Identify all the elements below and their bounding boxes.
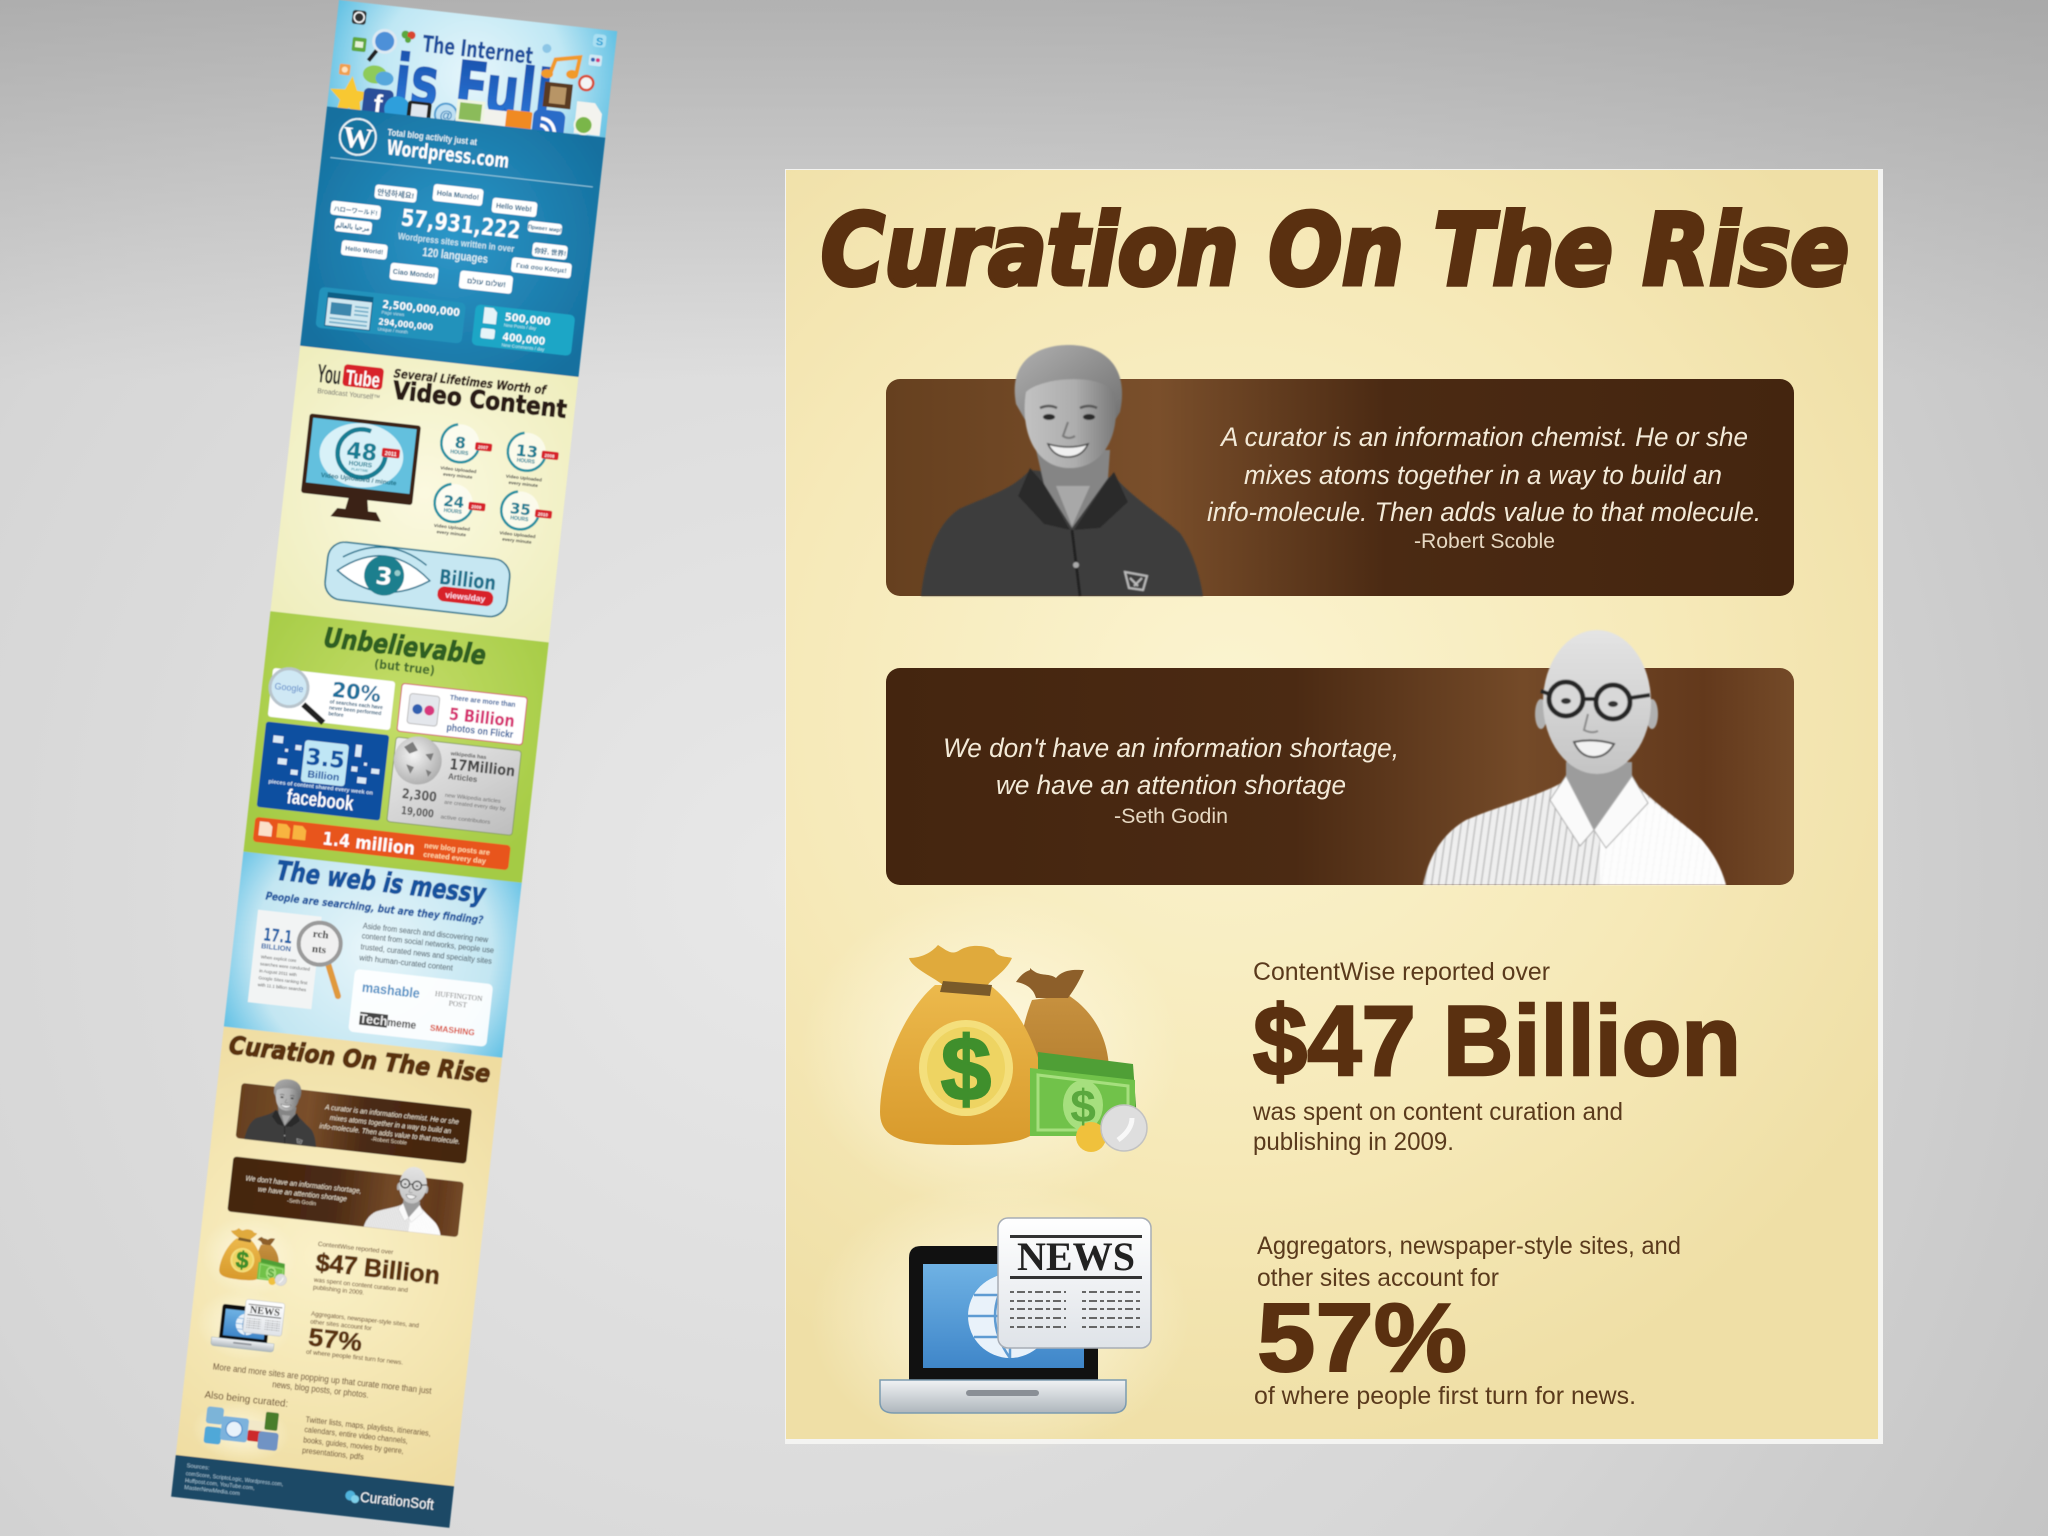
group: language bubbles: Hello World! [345, 245, 384, 256]
chart: 35 hours ring: HOURS [510, 515, 529, 523]
quote text: info-molecule. Then adds value to that molecule. [1207, 497, 1761, 527]
panel: posts and comments: New Comments / day [501, 342, 545, 352]
chart: 8 hours ring: 2007 [478, 444, 489, 450]
chart: 24 hours ring: Video Uploaded [434, 523, 470, 533]
illustration: search paper and magnifier [248, 910, 347, 1012]
heading: Curation On The Rise: Curation On The Rise [821, 194, 1849, 308]
chart: monitor with 48 hours: HOURS [348, 460, 373, 470]
text: paragraph: trusted, curated news and specialty sites [360, 942, 492, 966]
chart: 24 hours ring: every minute [436, 529, 467, 538]
chart: 8 hours ring: 8 [454, 433, 467, 453]
card: Google 20 percent: Google [274, 681, 304, 694]
card: Wikipedia: 19,000 [400, 804, 435, 821]
card: Google 20 percent: before [328, 711, 344, 719]
chart: 8 hours ring: every minute [443, 472, 473, 481]
card: Google 20 percent: never been performed [329, 705, 382, 717]
group: language bubbles: שלום עולם! [467, 276, 506, 289]
callout: 3 billion views per day: views/day [445, 590, 486, 604]
icon: laptop with news: NEWS [1017, 1234, 1135, 1279]
panel: full infographic strip, rotated [171, 0, 617, 1528]
text: list of curated things: books, guides, movies by genre, [303, 1436, 404, 1456]
group: language bubbles: مرحبا بالعالم [335, 221, 371, 233]
illustration: search paper and magnifier: 17.1 [262, 924, 293, 949]
heading: The Internet: The Internet [421, 32, 534, 70]
icons: curated content types [188, 1397, 294, 1467]
illustration: search paper and magnifier: Google Sites ranking first [258, 975, 308, 986]
text: sources: Sources: [186, 1463, 210, 1472]
stat: $47 Billion: ContentWise reported over [1253, 958, 1550, 986]
icons: social media collage: @ [439, 107, 453, 123]
heading: video content: Video Content [391, 376, 568, 424]
chart: 35 hours ring: 35 [509, 499, 532, 519]
stat: $47 Billion (small): publishing in 2009. [313, 1284, 365, 1297]
logo: YouTube [315, 358, 385, 402]
text: sources: comScore, ScriptoLogic, Wordpress.com, [185, 1471, 284, 1488]
panel: curated site logos: SMASHING [429, 1024, 475, 1038]
text: total blog activity: Total blog activity just at [387, 127, 478, 147]
group: language bubbles: Γειά σου Κόσμε! [516, 262, 567, 275]
quote card: Robert Scoble [886, 345, 1794, 596]
icon: document [483, 307, 498, 325]
panel: posts and comments: 500,000 [504, 311, 551, 329]
panel: The web is messy section [224, 852, 522, 1058]
stat: 57%: 57% [1257, 1283, 1467, 1392]
illustration: search paper and magnifier: with 11.1 billion searches [257, 982, 307, 993]
heading: several lifetimes: Several Lifetimes Worth of [393, 366, 548, 398]
panel: Unbelievable section [243, 611, 549, 883]
logo: YouTube: Broadcast Yourself™ [317, 388, 380, 402]
chart: 13 hours ring: 2008 [544, 453, 555, 459]
quote text: mixes atoms together in a way to build an [1244, 460, 1722, 490]
photo: Robert Scoble [921, 345, 1203, 596]
chart: 24 hours ring: 2009 [471, 504, 482, 510]
quote card: Godin (small) [227, 1147, 465, 1237]
illustration: search paper and magnifier: BILLION [261, 941, 291, 954]
attribution: -Seth Godin [1114, 805, 1228, 828]
chart: 8 hours ring: Video Uploaded [440, 465, 477, 475]
quote card: Godin (small): We don't have an information shortage, [245, 1176, 362, 1195]
text: also being curated: Also being curated: [204, 1389, 289, 1410]
stat: $47 Billion (small): $ [235, 1247, 250, 1274]
stat: 57%: Aggregators, newspaper-style sites, and [1257, 1232, 1681, 1260]
chart: monitor with 48 hours: 2011 [384, 451, 397, 458]
panel: enlarged Curation On The Rise [785, 169, 1883, 1460]
logo: CurationSoft: CurationSoft [359, 1489, 435, 1514]
group: language bubbles: ハローワールド! [333, 206, 378, 218]
chart: 24 hours ring [431, 482, 488, 540]
stat: 57%: of where people first turn for news. [1254, 1382, 1636, 1410]
chart: monitor with 48 hours: 48 [345, 439, 378, 467]
photo: Seth Godin [1423, 630, 1726, 885]
card: Flickr: There are more than [449, 695, 516, 709]
chart: 13 hours ring [504, 431, 561, 491]
icon: comment [480, 328, 495, 339]
stat: $47 Billion: publishing in 2009. [1253, 1128, 1454, 1156]
illustration: search paper and magnifier: When explicit core [261, 954, 297, 963]
stat: 57,931,222: 57,931,222 [400, 205, 522, 245]
card: Wikipedia: active contributors [440, 814, 491, 826]
text: paragraph: content from social networks, people use [361, 931, 495, 955]
icon: eye [335, 542, 433, 601]
text: list of curated things: presentations, pdfs [302, 1446, 364, 1462]
panel: Curation section in strip [176, 1027, 502, 1486]
text: more sites popping up: news, blog posts, or photos. [272, 1379, 369, 1400]
group: language bubbles: 안녕하세요! [377, 187, 415, 201]
panel: YouTube section [270, 346, 578, 642]
chart: 24 hours ring: HOURS [443, 508, 463, 516]
stat: $47 Billion (small) [196, 1210, 444, 1318]
panel: curated site logos: POST [448, 999, 468, 1010]
panel: curated site logos: meme [387, 1017, 417, 1032]
illustration: search paper and magnifier: nts [311, 943, 327, 957]
stat: 57% [1254, 1232, 1681, 1410]
card: Wikipedia: Articles [448, 772, 478, 784]
stat: 57%: other sites account for [1257, 1264, 1499, 1292]
chart: 13 hours ring: Video Uploaded [505, 474, 542, 484]
text: more sites popping up: More and more sites are popping up that curate more than just [212, 1361, 433, 1396]
chart: 13 hours ring: HOURS [516, 458, 536, 466]
stat: $47 Billion (small): $ [267, 1267, 275, 1281]
group: language bubbles: Hola Mundo! [436, 190, 479, 202]
group: language bubbles [323, 173, 579, 300]
group: language bubbles: Привет мир! [528, 224, 562, 234]
stat: 57% (small): of where people first turn for news. [306, 1349, 404, 1367]
chart: 35 hours ring [498, 489, 554, 548]
text: sources: Huffpost.com, YouTube.com, [185, 1478, 255, 1492]
stat: 57% (small) [192, 1284, 421, 1380]
icon: money bags [800, 890, 1180, 1210]
panel: page views: Unique / month [377, 326, 409, 335]
panel: posts and comments [471, 304, 575, 356]
banner: 1.4 million blog posts [253, 817, 511, 870]
text: sources [184, 1463, 285, 1502]
quote card: Scoble (small) [236, 1074, 473, 1164]
icon: laptop with news [810, 1180, 1190, 1460]
heading: is Full: is Full [390, 40, 556, 136]
stat: $47 Billion (small): ContentWise reported over [318, 1241, 395, 1256]
quote card: Scoble (small): info-molecule. Then adds value to that molecule. [319, 1123, 460, 1146]
icon: money bags: $ [1070, 1080, 1096, 1132]
card: Flickr [397, 683, 527, 745]
icon: WordPress logo: W [341, 120, 374, 157]
icon: money bags: $ [941, 1020, 991, 1120]
card: Facebook: facebook [286, 786, 355, 816]
heading: The web is messy: The web is messy [275, 856, 488, 910]
panel: page views: 294,000,000 [378, 317, 434, 333]
card: Wikipedia: 2,300 [401, 787, 437, 806]
group: language bubbles: Hello Web! [496, 203, 532, 214]
card: Facebook: Billion [307, 768, 340, 784]
card: Wikipedia: 17Million [449, 755, 516, 780]
banner: 1.4 million blog posts: 1.4 million [321, 828, 416, 860]
card: Wikipedia: wikipedia has [449, 751, 487, 761]
illustration: search paper and magnifier: searches were conducted [260, 961, 311, 972]
panel: footer [171, 1455, 454, 1528]
icon: browser window [325, 293, 373, 330]
chart: 24 hours ring: 24 [442, 492, 465, 512]
text: paragraph [358, 921, 496, 977]
quote card: Seth Godin [886, 630, 1794, 885]
chart: monitor with 48 hours: PLAYTIME [351, 467, 369, 473]
group: scaled curation content [189, 1030, 492, 1385]
quote text [1207, 422, 1761, 527]
stat: $47 Billion: was spent on content curation and [1252, 1098, 1623, 1126]
card: Wikipedia [387, 734, 522, 835]
illustration: search paper and magnifier: in August 2011 with [259, 968, 298, 977]
quote card: Scoble (small): -Robert Scoble [371, 1137, 407, 1147]
quote text: We don't have an information shortage, [943, 733, 1399, 763]
heading: Wordpress.com: Wordpress.com [386, 135, 510, 173]
chart: 35 hours ring: Video Uploaded [499, 530, 536, 540]
card: Wikipedia: are created every day by [444, 800, 507, 813]
heading: Unbelievable: Unbelievable [322, 622, 488, 671]
chart: 8 hours ring: HOURS [450, 449, 469, 457]
icon: eye: 3 [374, 562, 394, 591]
banner: 1.4 million blog posts: new blog posts are [424, 843, 490, 857]
panel: posts and comments: 400,000 [502, 331, 546, 348]
stat: 57% (small): other sites account for [310, 1319, 373, 1333]
text: list of curated things: calendars, entire video channels, [304, 1425, 408, 1446]
quote card: Godin (small): -Seth Godin [287, 1198, 316, 1207]
panel: curated site logos [348, 969, 493, 1047]
text: list of curated things: Twitter lists, maps, playlists, itineraries, [305, 1415, 431, 1438]
text: list of curated things [302, 1415, 431, 1469]
logo: YouTube: You [316, 358, 343, 390]
group: language bubbles: Ciao Mondo! [392, 269, 435, 280]
panel: posts and comments: New Posts / day [504, 322, 537, 331]
card: Google 20 percent: of searches each have [329, 699, 383, 711]
quote card: Scoble (small): A curator is an information chemist. He or she [324, 1104, 459, 1126]
stat: $47 Billion (small): $47 Billion [314, 1248, 441, 1290]
text: paragraph: Aside from search and discovering new [362, 921, 489, 944]
text: 120 languages: 120 languages [422, 245, 489, 266]
icons: social media collage: S [595, 36, 604, 49]
chart: monitor with 48 hours [299, 413, 421, 525]
panel: page views [315, 287, 466, 344]
quote text: A curator is an information chemist. He or she [1219, 422, 1748, 452]
quote card: Scoble (small): mixes atoms together in a way to build an [329, 1115, 452, 1135]
panel: curated site logos: Tech [359, 1011, 388, 1029]
group: language bubbles: 你好, 世界! [534, 245, 567, 258]
chart: 35 hours ring: 2010 [538, 511, 549, 518]
panel: page views: Page views [381, 310, 405, 317]
quote card: Godin (small): we have an attention shortage [258, 1186, 347, 1203]
chart: monitor with 48 hours: Video Uploaded / minute [320, 472, 397, 487]
chart: 13 hours ring: 13 [515, 441, 539, 462]
chart: 35 hours ring: every minute [502, 537, 532, 546]
card: Wikipedia: new Wikipedia articles [445, 793, 501, 805]
card: Google 20 percent: 20% [331, 678, 382, 707]
stat: $47 Billion: $47 Billion [1253, 985, 1741, 1096]
chart: 8 hours ring [437, 422, 494, 483]
callout: 3 billion views per day: Billion [438, 565, 497, 595]
chart: 13 hours ring: every minute [508, 480, 538, 489]
panel: curated site logos: mashable [361, 979, 421, 1001]
illustration: search paper and magnifier: rch [312, 928, 329, 942]
callout: 3 billion views per day [323, 540, 512, 618]
stat: $47 Billion [1252, 958, 1741, 1156]
icons: social media collage [327, 5, 611, 145]
banner: 1.4 million blog posts: created every day [423, 852, 486, 866]
text: but true: (but true) [373, 657, 436, 678]
text: sources: MasterNewMedia.com [184, 1485, 240, 1497]
logo: CurationSoft [344, 1487, 435, 1514]
icons: social media collage: f [372, 89, 384, 119]
heading: Curation On The Rise (small): Curation On The Rise [228, 1031, 492, 1089]
text: paragraph: with human-curated content [358, 953, 454, 973]
card: Google 20 percent [267, 667, 395, 730]
text: sites written: Wordpress sites written in over [397, 231, 515, 255]
card: Facebook [257, 721, 389, 821]
panel: header banner [326, 0, 617, 145]
text: subheading: People are searching, but are they finding? [265, 889, 485, 927]
quote text: we have an attention shortage [996, 770, 1346, 800]
card: Facebook: pieces of content shared every week on [268, 779, 373, 797]
attribution: -Robert Scoble [1414, 530, 1555, 553]
panel: page views: 2,500,000,000 [382, 299, 460, 319]
quote text [943, 733, 1399, 800]
stat: 57% (small): 57% [307, 1324, 363, 1357]
card: Flickr: 5 Billion [448, 705, 516, 732]
panel: curated site logos: HUFFINGTON [434, 989, 484, 1003]
panel: WordPress section [300, 106, 605, 377]
stat: 57% (small): Aggregators, newspaper-style sites, and [311, 1311, 420, 1330]
logo: YouTube: Tube [345, 366, 381, 393]
stat: 57% (small): NEWS [249, 1305, 281, 1319]
card: Facebook: 3.5 [304, 745, 346, 774]
card: Flickr: photos on Flickr [446, 723, 514, 741]
stat: $47 Billion (small): was spent on content curation and [313, 1276, 409, 1294]
